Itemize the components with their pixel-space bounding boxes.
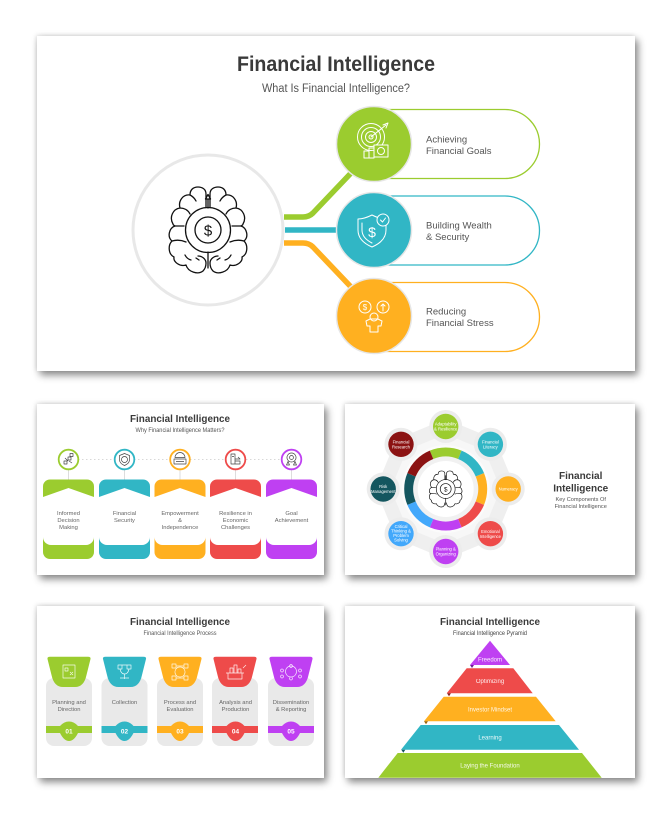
panel: pyramid bbox=[345, 606, 635, 778]
label: Making bbox=[59, 525, 78, 531]
card: informed decision making bbox=[43, 450, 94, 559]
node: planning and organizing bbox=[429, 535, 462, 568]
label: Financial bbox=[113, 511, 136, 517]
tier: learning: Learning bbox=[478, 736, 502, 742]
icon bbox=[172, 664, 188, 680]
tier: freedom bbox=[470, 641, 510, 668]
step 03: 03 bbox=[176, 728, 184, 736]
card body bbox=[210, 480, 261, 559]
grey track bbox=[383, 426, 508, 552]
card body bbox=[154, 480, 206, 559]
node: critical thinking: Thinking & bbox=[391, 528, 411, 534]
label: Achieving bbox=[426, 134, 467, 146]
label: Informed bbox=[57, 511, 80, 517]
number band bbox=[46, 722, 92, 741]
node: risk management: Risk bbox=[379, 484, 388, 489]
icon: target and money bbox=[358, 123, 388, 158]
card: resilience in economic challenges bbox=[210, 450, 261, 559]
label: & bbox=[178, 518, 182, 524]
label: Financial Stress bbox=[426, 318, 494, 329]
label: Evaluation bbox=[166, 707, 194, 713]
connector: green bbox=[284, 172, 352, 217]
label: Analysis and bbox=[219, 700, 252, 706]
icon: shield bbox=[120, 454, 130, 466]
node: financial research: Research bbox=[392, 444, 411, 450]
badge bbox=[336, 192, 412, 268]
node: financial research: Financial bbox=[393, 440, 409, 444]
icon ring bbox=[282, 450, 301, 469]
node: critical thinking: Problem bbox=[393, 533, 409, 538]
node: risk management bbox=[367, 472, 400, 506]
node: emotional intelligence: Intelligence bbox=[480, 534, 502, 539]
colored ring bbox=[409, 452, 483, 526]
icon ring bbox=[115, 450, 134, 469]
icon: empowerment bbox=[174, 452, 186, 464]
node: financial research bbox=[384, 428, 418, 461]
node: planning and organizing: Organizing bbox=[436, 552, 456, 556]
item: achieving financial goals bbox=[336, 106, 540, 182]
radial diagram bbox=[367, 410, 525, 568]
tier: freedom: Freedom bbox=[478, 658, 502, 664]
panel: key components bbox=[345, 404, 635, 575]
node: emotional intelligence bbox=[474, 517, 507, 550]
node: critical thinking: Critical bbox=[395, 524, 407, 529]
label: Direction bbox=[58, 707, 80, 713]
icon bbox=[118, 665, 131, 679]
icon: decision bbox=[64, 454, 73, 464]
tier: investor mindset bbox=[424, 697, 556, 724]
number band bbox=[212, 722, 258, 741]
label: Production bbox=[222, 707, 249, 713]
icon ring bbox=[170, 450, 190, 469]
icon: brain with dollar: $ bbox=[444, 486, 448, 493]
top tab bbox=[158, 657, 202, 687]
item: building wealth and security bbox=[336, 192, 540, 268]
card body bbox=[99, 480, 150, 559]
step 03 bbox=[157, 657, 203, 746]
label: Security bbox=[114, 518, 135, 524]
connector: teal bbox=[285, 227, 336, 233]
label: Reducing bbox=[426, 306, 466, 318]
tier: learning bbox=[401, 725, 579, 753]
connector: orange bbox=[284, 243, 352, 288]
node: financial literacy: Literacy bbox=[483, 444, 499, 450]
top tab bbox=[47, 657, 91, 687]
heading: Intelligence bbox=[553, 484, 609, 494]
step 01 bbox=[46, 657, 92, 746]
node: critical thinking bbox=[384, 517, 418, 550]
step 05: 05 bbox=[287, 728, 295, 736]
label: Financial Goals bbox=[426, 146, 492, 157]
title: Financial Intelligence bbox=[237, 53, 435, 76]
central circle bbox=[133, 155, 283, 305]
panel: process bbox=[37, 606, 324, 778]
node: adaptability and resilience: Adaptability bbox=[435, 422, 457, 426]
tier: optimizing bbox=[447, 668, 533, 696]
step 04: 04 bbox=[232, 728, 239, 736]
pill outline bbox=[374, 282, 540, 352]
icon ring bbox=[226, 450, 245, 469]
node: critical thinking: Solving bbox=[394, 538, 409, 542]
step 01: 01 bbox=[65, 728, 73, 736]
tier: laying the foundation bbox=[378, 753, 602, 778]
number band bbox=[102, 722, 148, 741]
label: Goal bbox=[285, 511, 298, 517]
label: Challenges bbox=[221, 525, 250, 531]
node: adaptability and resilience: & Resilience bbox=[434, 426, 458, 432]
title: Financial Intelligence bbox=[440, 616, 540, 628]
title: Financial Intelligence bbox=[130, 413, 230, 425]
node: financial literacy bbox=[474, 428, 507, 461]
card: financial security bbox=[99, 450, 150, 559]
panel: what is financial intelligence bbox=[37, 36, 635, 371]
subtitle: Financial Intelligence Process bbox=[144, 631, 216, 637]
label: Achievement bbox=[275, 518, 309, 524]
top tab bbox=[213, 657, 257, 687]
step 05 bbox=[268, 657, 314, 746]
label: Dissemination bbox=[273, 700, 309, 706]
label: Resilience in bbox=[219, 511, 252, 517]
badge bbox=[336, 278, 412, 354]
node: financial literacy: Financial bbox=[482, 440, 499, 444]
step 04 bbox=[212, 657, 258, 746]
card: goal achievement bbox=[266, 450, 317, 559]
node: numeracy: Numeracy bbox=[499, 486, 519, 492]
subtitle: Financial Intelligence Pyramid bbox=[453, 631, 527, 637]
icon: person with coins bbox=[359, 301, 389, 332]
item: reducing financial stress: $ bbox=[363, 303, 368, 312]
icon bbox=[226, 665, 246, 679]
subtitle: Why Financial Intelligence Matters? bbox=[136, 428, 225, 434]
subtitle: What Is Financial Intelligence? bbox=[262, 83, 410, 95]
label: & Reporting bbox=[276, 707, 306, 713]
icon: goal bbox=[286, 453, 296, 465]
node: emotional intelligence: Emotional bbox=[481, 529, 500, 534]
number band bbox=[157, 722, 203, 741]
tier: investor mindset: Investor Mindset bbox=[468, 708, 512, 714]
icon: brain with dollar bbox=[429, 471, 462, 507]
card body bbox=[266, 480, 317, 559]
label: Planning and bbox=[52, 700, 86, 706]
label: & Security bbox=[426, 232, 470, 243]
card body bbox=[43, 480, 94, 559]
badge bbox=[336, 106, 412, 182]
icon ring bbox=[59, 450, 78, 469]
top tab bbox=[269, 657, 313, 687]
step 02 bbox=[102, 657, 148, 746]
label: Building Wealth bbox=[426, 220, 492, 232]
subtitle: Financial Intelligence bbox=[555, 504, 607, 510]
label: Empowerment bbox=[161, 511, 199, 517]
item: reducing financial stress bbox=[336, 278, 540, 354]
pill outline bbox=[374, 196, 540, 265]
number band bbox=[268, 722, 314, 741]
icon: brain with dollar bbox=[169, 187, 247, 273]
icon: resilience bbox=[231, 454, 240, 464]
node: planning and organizing: Planning & bbox=[436, 546, 456, 552]
top tab bbox=[103, 657, 146, 687]
node: risk management: Management bbox=[371, 489, 396, 494]
card: empowerment and independence bbox=[154, 450, 206, 559]
pill outline bbox=[374, 110, 540, 178]
icon: shield bbox=[358, 214, 389, 247]
label: Independence bbox=[162, 525, 198, 531]
subtitle: Key Components Of bbox=[556, 497, 606, 503]
icon bbox=[63, 665, 75, 678]
label: Collection bbox=[112, 700, 137, 706]
label: Economic bbox=[223, 518, 248, 524]
title: Financial Intelligence bbox=[130, 616, 230, 628]
item: building wealth and security: $ bbox=[368, 224, 376, 240]
icon bbox=[281, 664, 302, 680]
label: Process and bbox=[164, 700, 196, 706]
node: adaptability and resilience bbox=[429, 410, 462, 443]
tier: laying the foundation: Laying the Foundation bbox=[460, 764, 520, 770]
icon: brain with dollar: $ bbox=[204, 222, 213, 240]
node: numeracy bbox=[492, 472, 525, 506]
tier: optimizing: Optimizing bbox=[476, 679, 504, 685]
step 02: 02 bbox=[121, 728, 128, 736]
panel: why financial intelligence matters bbox=[37, 404, 324, 575]
heading: Financial bbox=[559, 471, 603, 482]
label: Decision bbox=[57, 518, 80, 524]
